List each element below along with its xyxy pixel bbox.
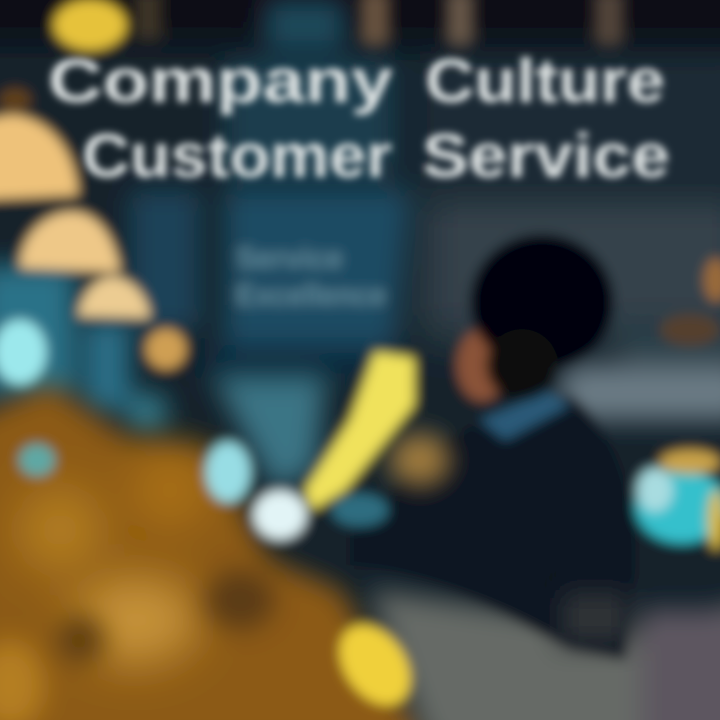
grey counter right [560, 325, 720, 420]
teal central wedge [130, 0, 410, 490]
title: Customer [82, 122, 392, 191]
bottom right floor [370, 590, 720, 720]
pendant lamps [0, 88, 720, 369]
title: Service [422, 122, 670, 191]
right cyan object [636, 450, 720, 550]
yellow diagonal light bar [305, 352, 414, 510]
title: Culture [425, 47, 665, 116]
person [332, 234, 636, 660]
golden mass bottom left [0, 385, 430, 720]
bottom yellow blob [325, 612, 425, 718]
caption text: Excellence [236, 279, 386, 312]
top yellow lamp [54, 0, 126, 50]
title: Company [48, 47, 394, 116]
left shelves in cyan [0, 265, 165, 430]
cyan glows [0, 320, 306, 539]
caption text [236, 242, 386, 312]
title [48, 47, 670, 191]
ceiling beams [135, 0, 622, 45]
caption text: Service [236, 242, 343, 275]
